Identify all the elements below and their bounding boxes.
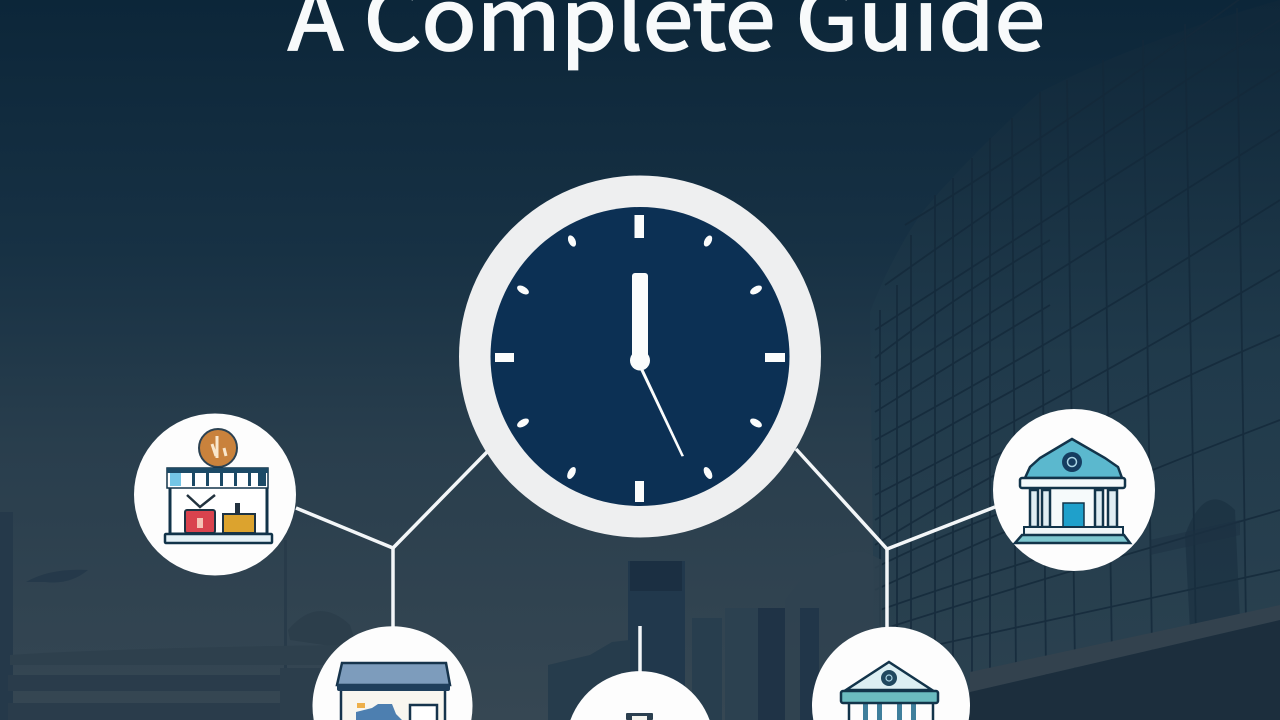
icon: bank with door (right) — [993, 409, 1155, 571]
connector lines — [296, 449, 995, 675]
icon: bank (bottom right) — [812, 627, 970, 720]
hour ticks — [495, 215, 785, 502]
icon: hourglass (bottom centre) — [570, 671, 710, 720]
clock — [459, 176, 821, 538]
icon: shop with awning (bottom left) — [312, 626, 472, 720]
clock hands — [630, 273, 684, 456]
icon: market stall (left) — [134, 414, 296, 576]
background: glass building on the right — [870, 0, 1280, 720]
background: low buildings and palm on the left — [0, 512, 358, 720]
background: city skyline at bottom centre — [548, 551, 882, 720]
